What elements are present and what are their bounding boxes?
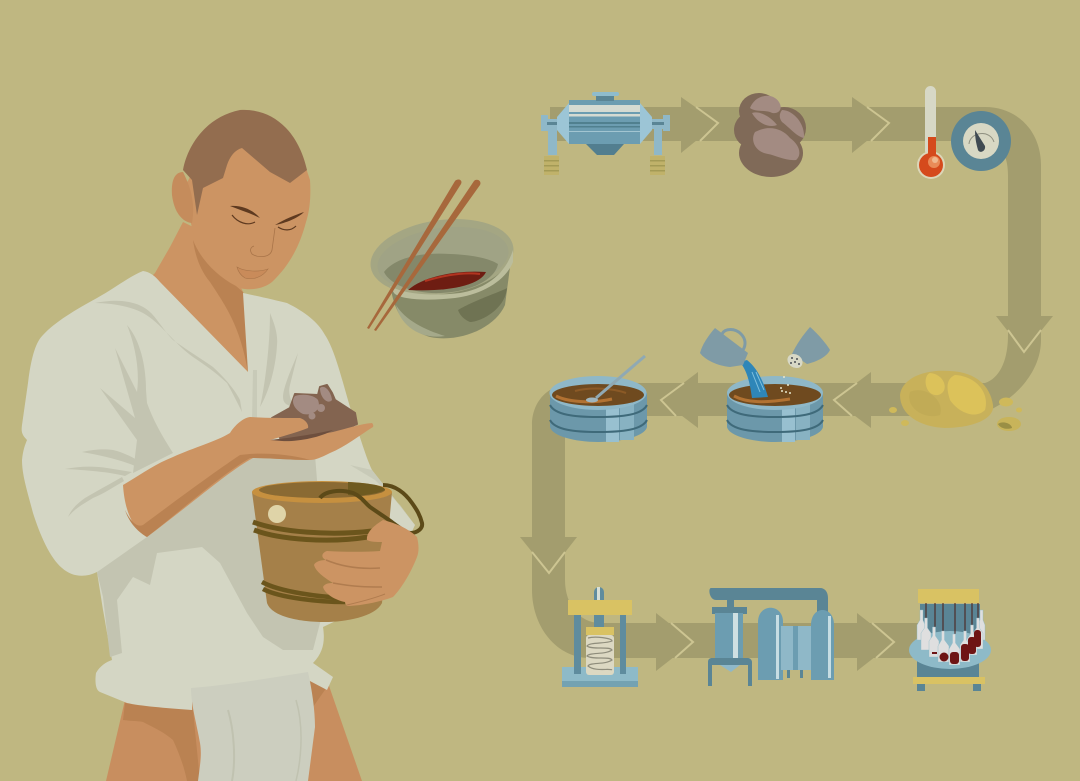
arm and hand holding lump: [123, 417, 373, 537]
hand on bucket: [314, 520, 418, 606]
loincloth: [191, 672, 315, 781]
icon: pressure gauge: [951, 111, 1011, 171]
process flow arrows: [520, 97, 1053, 671]
icon: vat with stirring spoon: [550, 356, 647, 442]
icon: bowl with chopsticks: [366, 180, 518, 338]
legs: [106, 677, 362, 781]
icon: vat with water and salt: [700, 327, 830, 442]
wooden bucket: [252, 481, 422, 622]
man figure: [22, 110, 422, 781]
icon: screw press: [562, 587, 638, 687]
robe: [22, 271, 415, 710]
icon: distillation still: [708, 588, 834, 686]
neck and face: [150, 110, 310, 372]
icon: brown lump: [734, 93, 806, 177]
icon: mixing machine: [541, 92, 670, 175]
icon: salt shaker: [780, 327, 830, 394]
icon: thermometer: [917, 86, 945, 179]
icon: yellow koji mass: [889, 371, 1022, 431]
lump in hand: [272, 385, 357, 442]
icon: bottling station: [909, 589, 991, 691]
icon: pouring cup: [700, 328, 748, 367]
